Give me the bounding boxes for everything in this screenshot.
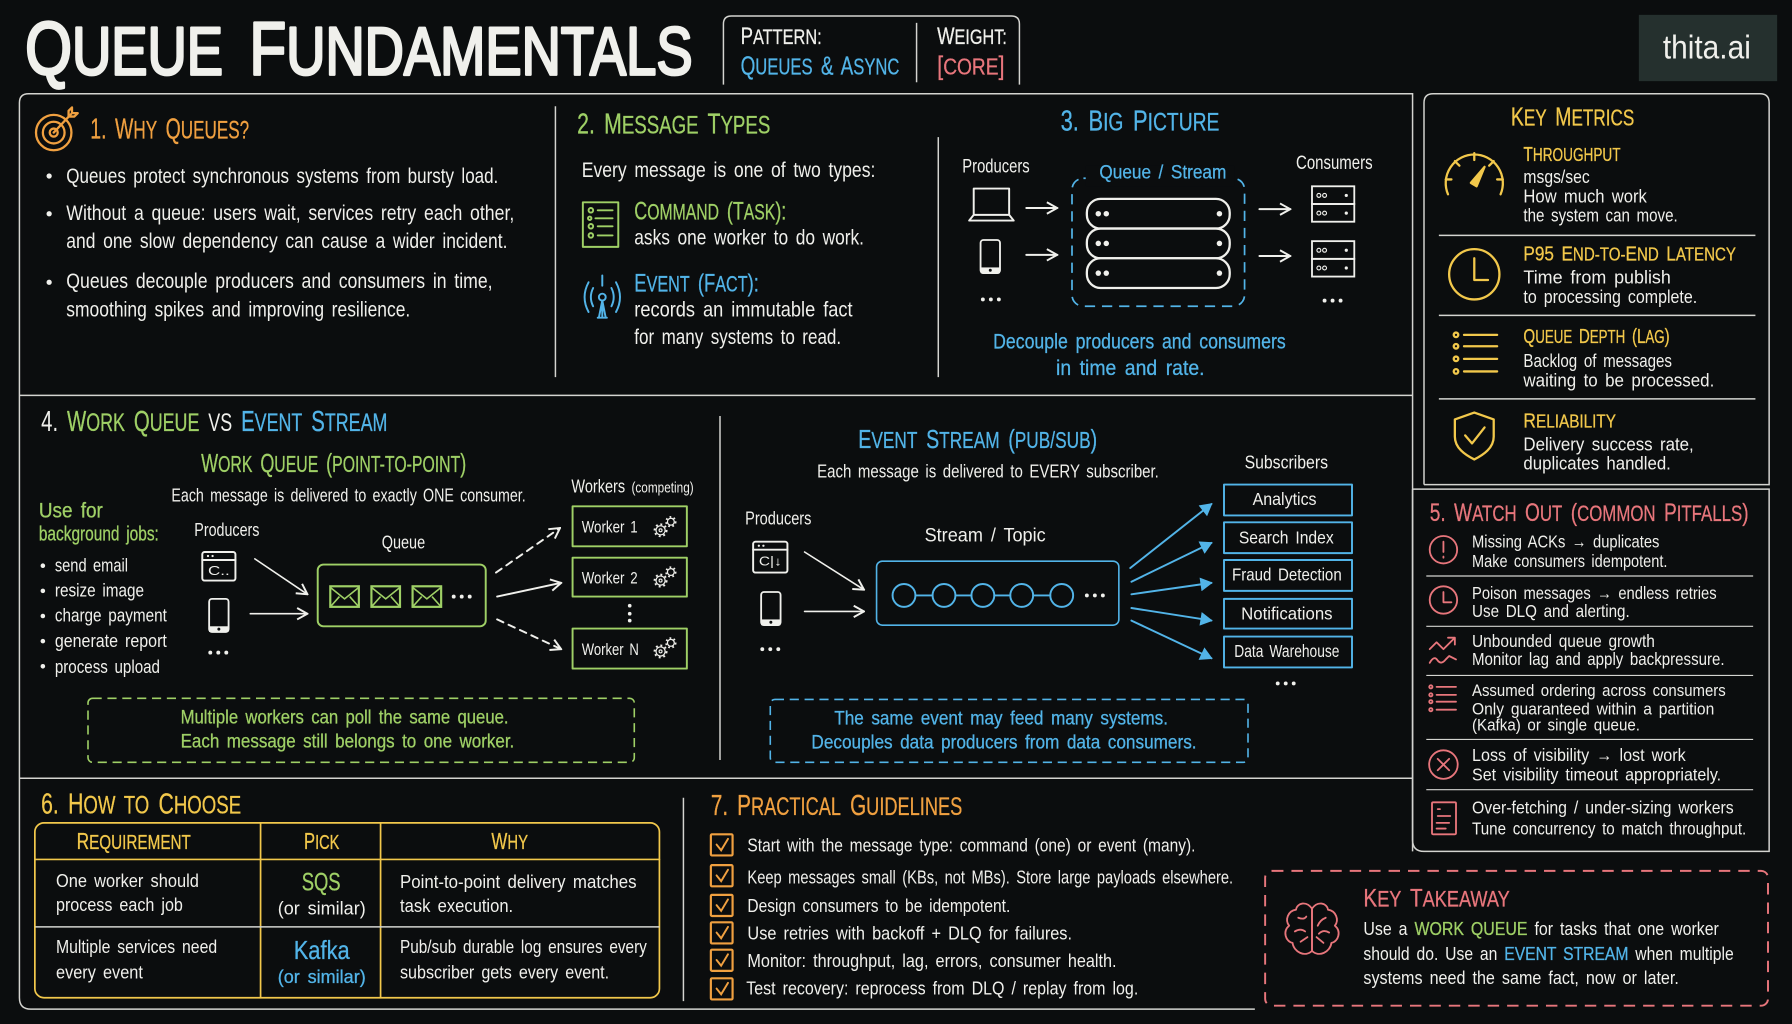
row: kafka: Kafka bbox=[294, 935, 350, 965]
subscriber: search index bbox=[1224, 522, 1352, 553]
row: sqs: Point-to-point delivery matches bbox=[400, 871, 637, 892]
table header bbox=[77, 828, 528, 854]
pitfall: poison messages: Use DLQ and alerting. bbox=[1472, 601, 1630, 621]
queue stack bbox=[1087, 199, 1230, 288]
row: kafka: every event bbox=[56, 961, 143, 982]
subscribers label: Subscribers bbox=[1245, 452, 1328, 473]
producers label: Producers bbox=[194, 519, 259, 540]
panel: 5 watch out bbox=[1413, 489, 1769, 851]
icon: clock bbox=[1430, 586, 1457, 614]
bullet list bbox=[47, 163, 514, 322]
metric: queue depth: waiting to be processed. bbox=[1523, 369, 1714, 390]
pitfall: over-fetching: Tune concurrency to match throughput. bbox=[1472, 818, 1746, 838]
subscriber: fraud detection bbox=[1224, 560, 1352, 591]
guideline 6: Test recovery: reprocess from DLQ / replay from log. bbox=[746, 977, 1138, 998]
metric: throughput: msgs/sec bbox=[1523, 166, 1590, 187]
description: Each message is delivered to EVERY subscriber. bbox=[817, 461, 1159, 482]
pitfall: unbounded growth bbox=[1472, 631, 1725, 669]
decision table bbox=[35, 823, 659, 998]
icon: brain bbox=[1285, 903, 1339, 954]
pitfall: assumed ordering: Assumed ordering across consumers bbox=[1472, 681, 1726, 700]
description: Each message is delivered to exactly ONE consumer. bbox=[171, 485, 526, 506]
row: sqs: task execution. bbox=[400, 895, 513, 916]
panel: 2 message types bbox=[577, 109, 875, 349]
metric: latency: to processing complete. bbox=[1523, 286, 1697, 307]
consumers label: Consumers bbox=[1296, 152, 1373, 174]
subscriber: analytics: Analytics bbox=[1253, 489, 1317, 509]
fan-out arrows bbox=[1130, 504, 1211, 658]
icon: growth trend bbox=[1430, 638, 1456, 663]
producer dots bbox=[760, 647, 780, 651]
icon: terminal bbox=[753, 542, 787, 573]
caption: in time and rate. bbox=[1056, 355, 1205, 380]
subscriber: analytics bbox=[1224, 485, 1352, 515]
heading: KEY METRICS bbox=[1511, 102, 1634, 132]
weight label: WEIGHT: bbox=[937, 23, 1007, 50]
pitfall: over-fetching bbox=[1472, 798, 1746, 838]
icon: shield bbox=[1455, 413, 1494, 459]
table header: WHY bbox=[491, 828, 528, 854]
metric: latency: Time from publish bbox=[1523, 266, 1671, 287]
command text: COMMAND (TASK): bbox=[634, 197, 786, 225]
producers label: Producers bbox=[962, 156, 1030, 178]
row: kafka: subscriber gets every event. bbox=[400, 961, 609, 982]
metric: queue depth: QUEUE DEPTH (LAG) bbox=[1523, 325, 1670, 348]
icon: phone bbox=[209, 599, 229, 632]
panel: 7 practical guidelines bbox=[711, 790, 1233, 999]
command text bbox=[634, 197, 864, 250]
use-for note: Use for bbox=[39, 498, 103, 523]
job list: process upload bbox=[55, 656, 160, 677]
row: sqs: process each job bbox=[56, 894, 183, 915]
stream label: Stream / Topic bbox=[925, 525, 1046, 547]
icon: terminal bbox=[202, 552, 235, 581]
pattern label: PATTERN: bbox=[741, 23, 822, 50]
guideline 4: Use retries with backoff + DLQ for failures. bbox=[747, 922, 1072, 943]
row: kafka: Multiple services need bbox=[56, 936, 217, 957]
producers label: Producers bbox=[745, 508, 811, 529]
subheading: EVENT STREAM (PUB/SUB) bbox=[858, 424, 1097, 454]
use-for note bbox=[39, 498, 159, 546]
icon: laptop bbox=[969, 189, 1014, 221]
metric: throughput bbox=[1523, 143, 1678, 226]
pitfall: unbounded growth: Monitor lag and apply backpressure. bbox=[1472, 649, 1725, 669]
bullet list: and one slow dependency can cause a wider incident. bbox=[66, 228, 507, 253]
guideline 3: Design consumers to be idempotent. bbox=[747, 895, 1010, 916]
metric: reliability: RELIABILITY bbox=[1523, 409, 1616, 432]
panel: 3 big picture bbox=[962, 105, 1373, 380]
pitfall: loss of visibility: Loss of visibility → lost work bbox=[1472, 745, 1686, 765]
arrows to stream bbox=[805, 552, 864, 611]
callout: work queue: Multiple workers can poll the same queue. bbox=[181, 706, 509, 728]
arrows to workers bbox=[496, 528, 561, 649]
takeaway text bbox=[1363, 918, 1734, 988]
subscriber: data warehouse bbox=[1224, 637, 1352, 667]
bullet list: Queues protect synchronous systems from bursty load. bbox=[66, 163, 498, 188]
metric: throughput: THROUGHPUT bbox=[1523, 143, 1621, 166]
worker 1 bbox=[573, 506, 687, 546]
icon: terminal: C.. bbox=[208, 564, 230, 578]
metric: throughput: How much work bbox=[1523, 185, 1648, 206]
worker n: Worker N bbox=[582, 640, 639, 659]
queue label: Queue / Stream bbox=[1099, 161, 1226, 183]
use-for note: background jobs: bbox=[39, 523, 159, 546]
worker n bbox=[573, 629, 687, 669]
arrows to queue bbox=[250, 559, 307, 614]
title: QUEUE FUNDAMENTALS bbox=[25, 6, 693, 90]
heading: 3. BIG PICTURE bbox=[1061, 105, 1219, 137]
icon: command checklist bbox=[583, 202, 618, 247]
pitfall: loss of visibility bbox=[1472, 745, 1721, 785]
stream box bbox=[877, 561, 1119, 625]
job list: send email bbox=[55, 554, 128, 575]
callout: event stream: Decouples data producers from data consumers. bbox=[811, 732, 1197, 754]
row: sqs: SQS bbox=[302, 868, 341, 896]
table header: PICK bbox=[304, 828, 340, 854]
workers label: Workers (competing) bbox=[571, 476, 694, 497]
panel: key takeaway bbox=[1265, 871, 1768, 1006]
event text: records an immutable fact bbox=[634, 297, 853, 322]
job list: resize image bbox=[55, 580, 144, 601]
queue label: Queue bbox=[382, 532, 425, 553]
row: kafka bbox=[56, 935, 648, 987]
row: sqs bbox=[56, 868, 637, 918]
callout: work queue: Each message still belongs to one worker. bbox=[181, 730, 514, 752]
panel: 4 work queue vs event stream bbox=[39, 406, 1352, 762]
icon: depth list bbox=[1454, 333, 1497, 374]
pitfall: loss of visibility: Set visibility timeout appropriately. bbox=[1472, 765, 1721, 785]
takeaway text: should do. Use an EVENT STREAM when multiple bbox=[1363, 943, 1734, 964]
metric: reliability bbox=[1523, 409, 1694, 474]
metric: queue depth: Backlog of messages bbox=[1523, 350, 1672, 371]
metric: reliability: Delivery success rate, bbox=[1523, 433, 1694, 454]
queue box bbox=[318, 565, 486, 626]
metric: queue depth bbox=[1523, 325, 1714, 390]
pitfall: missing acks bbox=[1472, 531, 1667, 571]
icon: event antenna bbox=[585, 275, 620, 318]
intro text: Every message is one of two types: bbox=[582, 157, 875, 182]
worker 2: Worker 2 bbox=[582, 568, 638, 587]
row: sqs: (or similar) bbox=[278, 897, 366, 918]
bullet list: Queues decouple producers and consumers in time, bbox=[66, 268, 493, 293]
heading: 2. MESSAGE TYPES bbox=[577, 109, 770, 141]
callout: work queue bbox=[88, 698, 634, 762]
row: kafka: (or similar) bbox=[278, 966, 366, 987]
icon: phone bbox=[981, 240, 1000, 273]
panel: key metrics bbox=[1424, 94, 1769, 485]
pitfall: missing acks: Missing ACKs → duplicates bbox=[1472, 531, 1660, 551]
job list bbox=[41, 554, 167, 677]
table header: REQUIREMENT bbox=[77, 828, 191, 854]
producer dots bbox=[981, 297, 1001, 301]
pitfall: assumed ordering: (Kafka) or single queue. bbox=[1472, 715, 1640, 734]
metric: latency: P95 END-TO-END LATENCY bbox=[1523, 243, 1736, 266]
icon: clock bbox=[1449, 249, 1499, 299]
icon: gauge bbox=[1446, 153, 1503, 194]
header badge: pattern and weight bbox=[723, 16, 1019, 85]
weight value: [CORE] bbox=[937, 50, 1005, 80]
pitfall: poison messages bbox=[1472, 583, 1717, 621]
brand badge: thita.ai bbox=[1663, 29, 1751, 66]
pattern value: QUEUES & ASYNC bbox=[741, 50, 899, 80]
subscriber: notifications bbox=[1224, 599, 1352, 629]
pitfall: unbounded growth: Unbounded queue growth bbox=[1472, 631, 1655, 651]
pitfall: poison messages: Poison messages → endless retries bbox=[1472, 583, 1717, 603]
command text: asks one worker to do work. bbox=[634, 225, 864, 250]
event text bbox=[634, 269, 853, 349]
job list: charge payment bbox=[55, 605, 167, 626]
heading: 7. PRACTICAL GUIDELINES bbox=[711, 790, 962, 822]
job list: generate report bbox=[55, 630, 167, 651]
subscriber: search index: Search Index bbox=[1239, 527, 1334, 547]
heading: 1. WHY QUEUES? bbox=[90, 113, 249, 145]
pitfall: assumed ordering bbox=[1472, 681, 1726, 734]
producer dots bbox=[208, 651, 228, 655]
sub-panel: work queue bbox=[39, 448, 694, 762]
takeaway text: systems need the same fact, now or later. bbox=[1363, 967, 1679, 988]
subheading: WORK QUEUE (POINT-TO-POINT) bbox=[201, 448, 466, 478]
metric: reliability: duplicates handled. bbox=[1523, 453, 1671, 474]
worker 2 bbox=[573, 558, 687, 597]
queue dashed container bbox=[1072, 178, 1245, 306]
subscriber: fraud detection: Fraud Detection bbox=[1232, 565, 1342, 585]
subscriber: data warehouse: Data Warehouse bbox=[1234, 641, 1340, 661]
metric: latency bbox=[1523, 243, 1736, 307]
panel: 1 why queues bbox=[36, 107, 514, 322]
caption: Decouple producers and consumers bbox=[993, 329, 1286, 354]
icon: target bbox=[36, 107, 78, 150]
guideline 2: Keep messages small (KBs, not MBs). Store large payloads elsewhere. bbox=[747, 866, 1233, 887]
heading: 4. WORK QUEUE VS EVENT STREAM bbox=[41, 406, 387, 438]
arrows in bbox=[1026, 208, 1057, 255]
callout: event stream bbox=[770, 699, 1248, 762]
heading: 5. WATCH OUT (COMMON PITFALLS) bbox=[1430, 499, 1749, 527]
metric: throughput: the system can move. bbox=[1523, 205, 1678, 226]
guideline 5: Monitor: throughput, lag, errors, consumer health. bbox=[747, 950, 1117, 971]
icon: checklist document bbox=[1432, 802, 1456, 834]
bullet list: Without a queue: users wait, services retry each other, bbox=[66, 200, 514, 225]
icon: consumer servers bbox=[1312, 186, 1354, 303]
heading: KEY TAKEAWAY bbox=[1363, 884, 1510, 912]
icon: x circle bbox=[1429, 750, 1458, 779]
worker 1: Worker 1 bbox=[582, 518, 638, 537]
pitfall: assumed ordering: Only guaranteed within a partition bbox=[1472, 699, 1714, 718]
brand badge bbox=[1639, 15, 1777, 81]
icon: phone bbox=[761, 592, 781, 625]
heading: 6. HOW TO CHOOSE bbox=[41, 789, 241, 821]
row: sqs: One worker should bbox=[56, 870, 199, 891]
caption bbox=[993, 329, 1286, 380]
arrows out bbox=[1259, 209, 1290, 256]
panel: 6 how to choose bbox=[35, 789, 659, 998]
icon: ordered list bbox=[1429, 685, 1456, 711]
takeaway text: Use a WORK QUEUE for tasks that one worker bbox=[1363, 918, 1719, 939]
pitfall: missing acks: Make consumers idempotent. bbox=[1472, 551, 1667, 571]
callout: event stream: The same event may feed many systems. bbox=[834, 708, 1168, 730]
pitfall: over-fetching: Over-fetching / under-sizing workers bbox=[1472, 798, 1734, 818]
event text: EVENT (FACT): bbox=[634, 269, 759, 297]
vertical dots bbox=[628, 604, 632, 622]
event text: for many systems to read. bbox=[634, 324, 841, 349]
bullet list: smoothing spikes and improving resilience. bbox=[66, 297, 410, 322]
subscriber: notifications: Notifications bbox=[1241, 603, 1333, 623]
subscriber dots bbox=[1276, 681, 1296, 685]
sub-panel: event stream bbox=[745, 424, 1352, 762]
icon: alert bbox=[1430, 536, 1457, 563]
row: kafka: Pub/sub durable log ensures every bbox=[400, 936, 648, 957]
guideline 1: Start with the message type: command (one) or event (many). bbox=[747, 834, 1195, 855]
icon: terminal: C|↓ bbox=[759, 555, 782, 569]
